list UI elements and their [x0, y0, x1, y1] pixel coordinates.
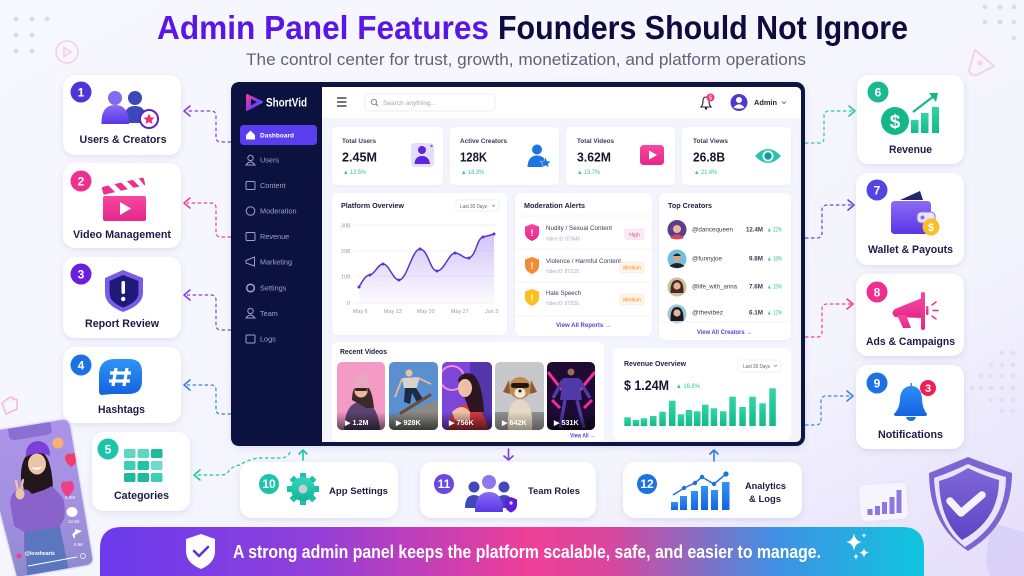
decorative tile — [986, 524, 1024, 576]
signal decoration — [859, 482, 908, 522]
icon: bell with badge — [701, 94, 714, 110]
icon: play — [640, 145, 664, 165]
alert: hate speech: Medium — [623, 297, 641, 303]
panel: recent videos: Recent Videos — [340, 347, 387, 356]
phone illustration — [0, 415, 98, 576]
icon: bell with badge: 5 — [709, 96, 712, 102]
arrow: categories — [194, 452, 290, 480]
connector arrows — [184, 106, 855, 480]
icon: megaphone — [892, 292, 938, 330]
panel: dashboard — [231, 82, 805, 446]
badge 10: 10 — [262, 477, 276, 491]
admin profile: Admin — [754, 98, 777, 107]
line chart: May 27 — [451, 309, 469, 315]
badge 4: 4 — [78, 358, 85, 372]
badge 1: 1 — [78, 86, 85, 100]
stat: Active Creators: 128K — [460, 150, 488, 164]
decorative dot grid top left — [14, 16, 50, 54]
dropdown: last 30 days — [738, 360, 781, 372]
stat: Active Creators: ▲ 18.3% — [461, 170, 485, 176]
panel: moderation alerts — [515, 193, 652, 336]
panel: revenue overview: ▲ 16.8% — [676, 383, 700, 390]
panel: revenue overview: Revenue Overview — [624, 359, 686, 368]
creator row 2 — [668, 250, 783, 268]
badge 9: 9 — [874, 376, 881, 390]
line chart: May 20 — [417, 309, 435, 315]
alert: hate speech — [525, 289, 644, 307]
creator row 2: ▲ 18% — [767, 256, 783, 262]
card 3: Report Review: Report Review — [85, 318, 159, 330]
shield illustration — [929, 457, 1012, 551]
line chart — [341, 224, 498, 315]
title: Admin Panel Features — [157, 9, 489, 46]
arrow: hashtags — [184, 380, 231, 414]
card 6: Revenue: Revenue — [889, 144, 932, 156]
card 12: Analytics & Logs — [623, 462, 802, 518]
badge 11 — [434, 474, 454, 494]
icon: user — [411, 143, 434, 167]
card 10: App Settings: App Settings — [329, 486, 388, 497]
thumbnail: dog — [495, 362, 544, 430]
line chart: 20B — [341, 249, 351, 255]
card 3: Report Review — [63, 257, 181, 338]
icon: analytics — [671, 471, 730, 510]
creator row 4: @thevibez — [692, 310, 723, 316]
dropdown: last 30 days — [456, 200, 499, 211]
badge 2: 2 — [78, 174, 85, 188]
footer banner — [100, 527, 924, 576]
nav: Logs: Logs — [260, 334, 276, 344]
creator row 3: @life_with_anna — [692, 284, 737, 290]
icon: creator — [528, 144, 551, 168]
panel: platform overview — [332, 193, 507, 335]
thumbnail: skateboarder — [389, 362, 438, 430]
card 5: Categories — [92, 432, 190, 511]
icon: revenue: $ — [890, 112, 901, 133]
banner text: A strong admin panel keeps the platform scalable, safe, and easier to manage. — [233, 542, 821, 562]
thumbnail: neon dancer — [547, 362, 595, 430]
alert: nudity — [525, 224, 644, 242]
admin profile — [730, 94, 786, 111]
decorative play circle — [56, 41, 78, 63]
arrow: users — [184, 106, 231, 142]
phone hearts and actions: @lovehearts — [25, 551, 55, 557]
line chart: 30B — [341, 224, 351, 230]
card 9: Notifications: Notifications — [878, 429, 943, 441]
badge 12 — [637, 474, 657, 494]
nav: Dashboard active — [240, 125, 317, 145]
arrow: wallet — [805, 200, 854, 238]
panel: platform overview: Platform Overview — [341, 201, 404, 210]
title: Founders Should Not Ignore — [498, 9, 908, 46]
search box: Search anything... — [383, 100, 436, 107]
line chart: Jun 3 — [485, 309, 498, 315]
alert: violence: ! — [530, 261, 534, 271]
dashboard frame — [231, 82, 805, 446]
arrow: analytics — [710, 450, 718, 461]
alert: hate speech: Video ID: 872531 — [546, 301, 579, 307]
link: view all reports: View All Reports → — [556, 323, 611, 329]
card 12: Analytics & Logs: Analytics — [745, 481, 786, 492]
stat: Total Users: ▲ 12.5% — [343, 170, 367, 176]
card 9: Notifications — [856, 365, 964, 449]
decorative dot grid top right — [982, 4, 1016, 40]
panel: top creators — [659, 193, 791, 340]
panel: revenue overview — [613, 348, 791, 440]
stat: Total Users: 2.45M — [342, 150, 377, 164]
badge 8: 8 — [874, 286, 881, 300]
card 11: Team Roles: Team Roles — [528, 486, 580, 497]
card 10: App Settings — [240, 462, 398, 518]
dropdown: last 30 days: Last 30 Days — [743, 364, 770, 370]
subtitle: The control center for trust, growth, monetization, and platform operations — [246, 51, 806, 69]
card 5: Categories: Categories — [114, 490, 169, 502]
icon: grid — [124, 449, 162, 482]
decorative puzzle shape — [2, 397, 17, 414]
line chart: 0 — [347, 301, 350, 307]
logo: ShortVid: ShortVid — [266, 98, 307, 110]
creator row 1: 12.4M — [746, 226, 763, 234]
stat: Total Videos — [566, 127, 675, 185]
phone hearts and actions — [16, 438, 86, 566]
stat: Total Views: Total Views — [693, 138, 728, 145]
decorative play triangle — [969, 50, 994, 75]
thumbnail: neon dancer: ▶ 531K — [553, 418, 580, 427]
thumbnail: skateboarder: ▶ 928K — [395, 418, 422, 427]
creator row 2: @funnyjoe — [692, 256, 722, 262]
logo: ShortVid — [247, 95, 307, 110]
card 2: Video Management — [63, 163, 181, 248]
arrow: team roles — [504, 449, 513, 460]
creator row 4 — [668, 304, 783, 324]
sidebar — [231, 82, 322, 446]
panel: moderation alerts: Moderation Alerts — [524, 201, 585, 210]
icon: menu — [337, 98, 346, 106]
card 2: Video Management: Video Management — [73, 229, 171, 241]
nav: Logs — [246, 334, 276, 344]
stat: Active Creators: Active Creators — [460, 138, 507, 145]
nav: Users — [246, 155, 279, 165]
creator row 4: ▲ 12% — [767, 310, 783, 316]
alert: violence — [525, 257, 644, 275]
bar chart — [624, 388, 776, 426]
icon: gear — [287, 473, 319, 505]
card 4: Hashtags — [63, 347, 181, 423]
alert: violence: Violence / Harmful Content — [546, 258, 621, 265]
alert: nudity: Video ID: 873645 — [546, 236, 580, 242]
icon: team — [465, 475, 517, 512]
icon: shield alert — [105, 270, 143, 312]
stat: Total Videos: 3.62M — [577, 150, 611, 164]
icon: users — [101, 91, 158, 128]
nav: Marketing — [246, 257, 292, 266]
icon: eye — [755, 149, 781, 163]
nav: Revenue: Revenue — [260, 232, 289, 241]
stat: Total Users: Total Users — [342, 138, 376, 145]
card 11: Team Roles — [420, 462, 596, 518]
card 8: Ads & Campaigns — [856, 274, 964, 356]
phone hearts and actions: 8.6K — [74, 542, 83, 547]
stat: Total Users — [332, 127, 443, 185]
thumbnail: dog: ▶ 642K — [501, 418, 528, 427]
decorative dot grid right — [970, 351, 1015, 413]
nav: Content: Content — [260, 181, 286, 190]
nav: Revenue — [246, 232, 289, 241]
creator row 3: ▲ 15% — [767, 284, 783, 290]
creator row 1 — [668, 220, 783, 240]
phone hearts and actions: 12.5K — [68, 519, 80, 524]
panel: recent videos — [332, 342, 604, 442]
card 1: Users & Creators — [63, 75, 181, 155]
nav: Team — [246, 308, 278, 318]
arrow: revenue — [805, 106, 855, 143]
search box — [365, 94, 495, 111]
alert: violence: Video ID: 873120 — [546, 269, 579, 275]
card 7: Wallet & Payouts: Wallet & Payouts — [868, 244, 953, 256]
creator row 1: @dancequeen — [692, 226, 733, 234]
badge 3: 3 — [78, 268, 85, 282]
creator row 4: 6.1M — [749, 310, 763, 316]
arrow: report — [184, 290, 231, 330]
phone hearts and actions: 5.2M — [65, 495, 75, 500]
nav: Users: Users — [260, 156, 279, 164]
dashboard content background — [322, 87, 801, 442]
badge 7: 7 — [874, 184, 881, 198]
card 12: Analytics & Logs: & Logs — [749, 494, 781, 505]
line chart: May 6 — [353, 309, 368, 315]
thumbnail: girl with neon: ▶ 756K — [448, 418, 475, 427]
dropdown: last 30 days: Last 30 Days — [460, 204, 487, 210]
link: view all creators: View All Creators → — [697, 330, 752, 336]
badge 12: 12 — [640, 477, 654, 491]
stat: Total Videos: Total Videos — [577, 138, 614, 145]
phone notch — [8, 422, 52, 440]
panel: top creators: Top Creators — [668, 201, 712, 210]
stat: Total Views — [682, 127, 791, 185]
stat: Active Creators — [450, 127, 559, 185]
nav: Settings: Settings — [260, 284, 287, 292]
alert: nudity: ! — [530, 228, 534, 238]
card 7: Wallet & Payouts — [856, 173, 964, 265]
stat: Total Videos: ▲ 15.7% — [577, 170, 601, 176]
nav: Moderation: Moderation — [260, 206, 297, 216]
icon: clapperboard — [102, 177, 146, 221]
icon: bell: 3 — [925, 383, 931, 395]
card 1: Users & Creators: Users & Creators — [80, 134, 166, 146]
arrow: app settings — [299, 450, 307, 460]
arrow: notifications — [805, 391, 853, 425]
creator row 3: 7.6M — [749, 284, 763, 290]
creator row 1: ▲ 22% — [767, 228, 783, 234]
card 8: Ads & Campaigns: Ads & Campaigns — [866, 336, 955, 348]
nav: Dashboard active: Dashboard — [260, 132, 294, 139]
line chart: 10B — [341, 274, 351, 280]
badge 6: 6 — [875, 86, 882, 100]
panel: revenue overview: $ 1.24M — [624, 378, 669, 393]
alert: nudity: High — [629, 232, 640, 238]
stat: Total Views: ▲ 21.4% — [694, 170, 718, 176]
icon: sparkles — [846, 533, 869, 560]
arrow: video — [184, 198, 231, 237]
check mark — [950, 495, 982, 513]
link: view all videos: View All → — [570, 434, 595, 440]
icon: hashtag bubble — [99, 359, 142, 395]
creator row 3 — [668, 278, 783, 296]
creator row 2: 9.8M — [749, 256, 763, 262]
card 6: Revenue — [857, 75, 964, 164]
top bar — [322, 87, 801, 118]
thumbnail: girl in pink — [337, 362, 385, 430]
badge 11: 11 — [438, 477, 451, 491]
line chart: May 13 — [384, 309, 402, 315]
icon: shield check — [186, 534, 215, 569]
alert: hate speech: Hate Speech — [546, 290, 581, 297]
creator figure — [10, 441, 70, 576]
nav: Team: Team — [260, 309, 278, 318]
thumbnail: girl in pink: ▶ 1.2M — [344, 418, 369, 427]
nav: Marketing: Marketing — [260, 258, 292, 266]
alert: hate speech: ! — [530, 293, 534, 303]
alert: violence: Medium — [623, 265, 641, 271]
stat: Total Views: 26.8B — [693, 150, 725, 164]
nav: Content — [246, 181, 286, 190]
icon: wallet: $ — [928, 222, 934, 234]
card 4: Hashtags: Hashtags — [98, 404, 145, 416]
alert: nudity: Nudity / Sexual Content — [546, 225, 612, 232]
thumbnail: girl with neon — [440, 362, 492, 430]
badge 10 — [259, 474, 279, 494]
arrow: ads — [805, 299, 853, 337]
nav: Settings — [247, 284, 287, 292]
badge 5: 5 — [105, 442, 112, 456]
